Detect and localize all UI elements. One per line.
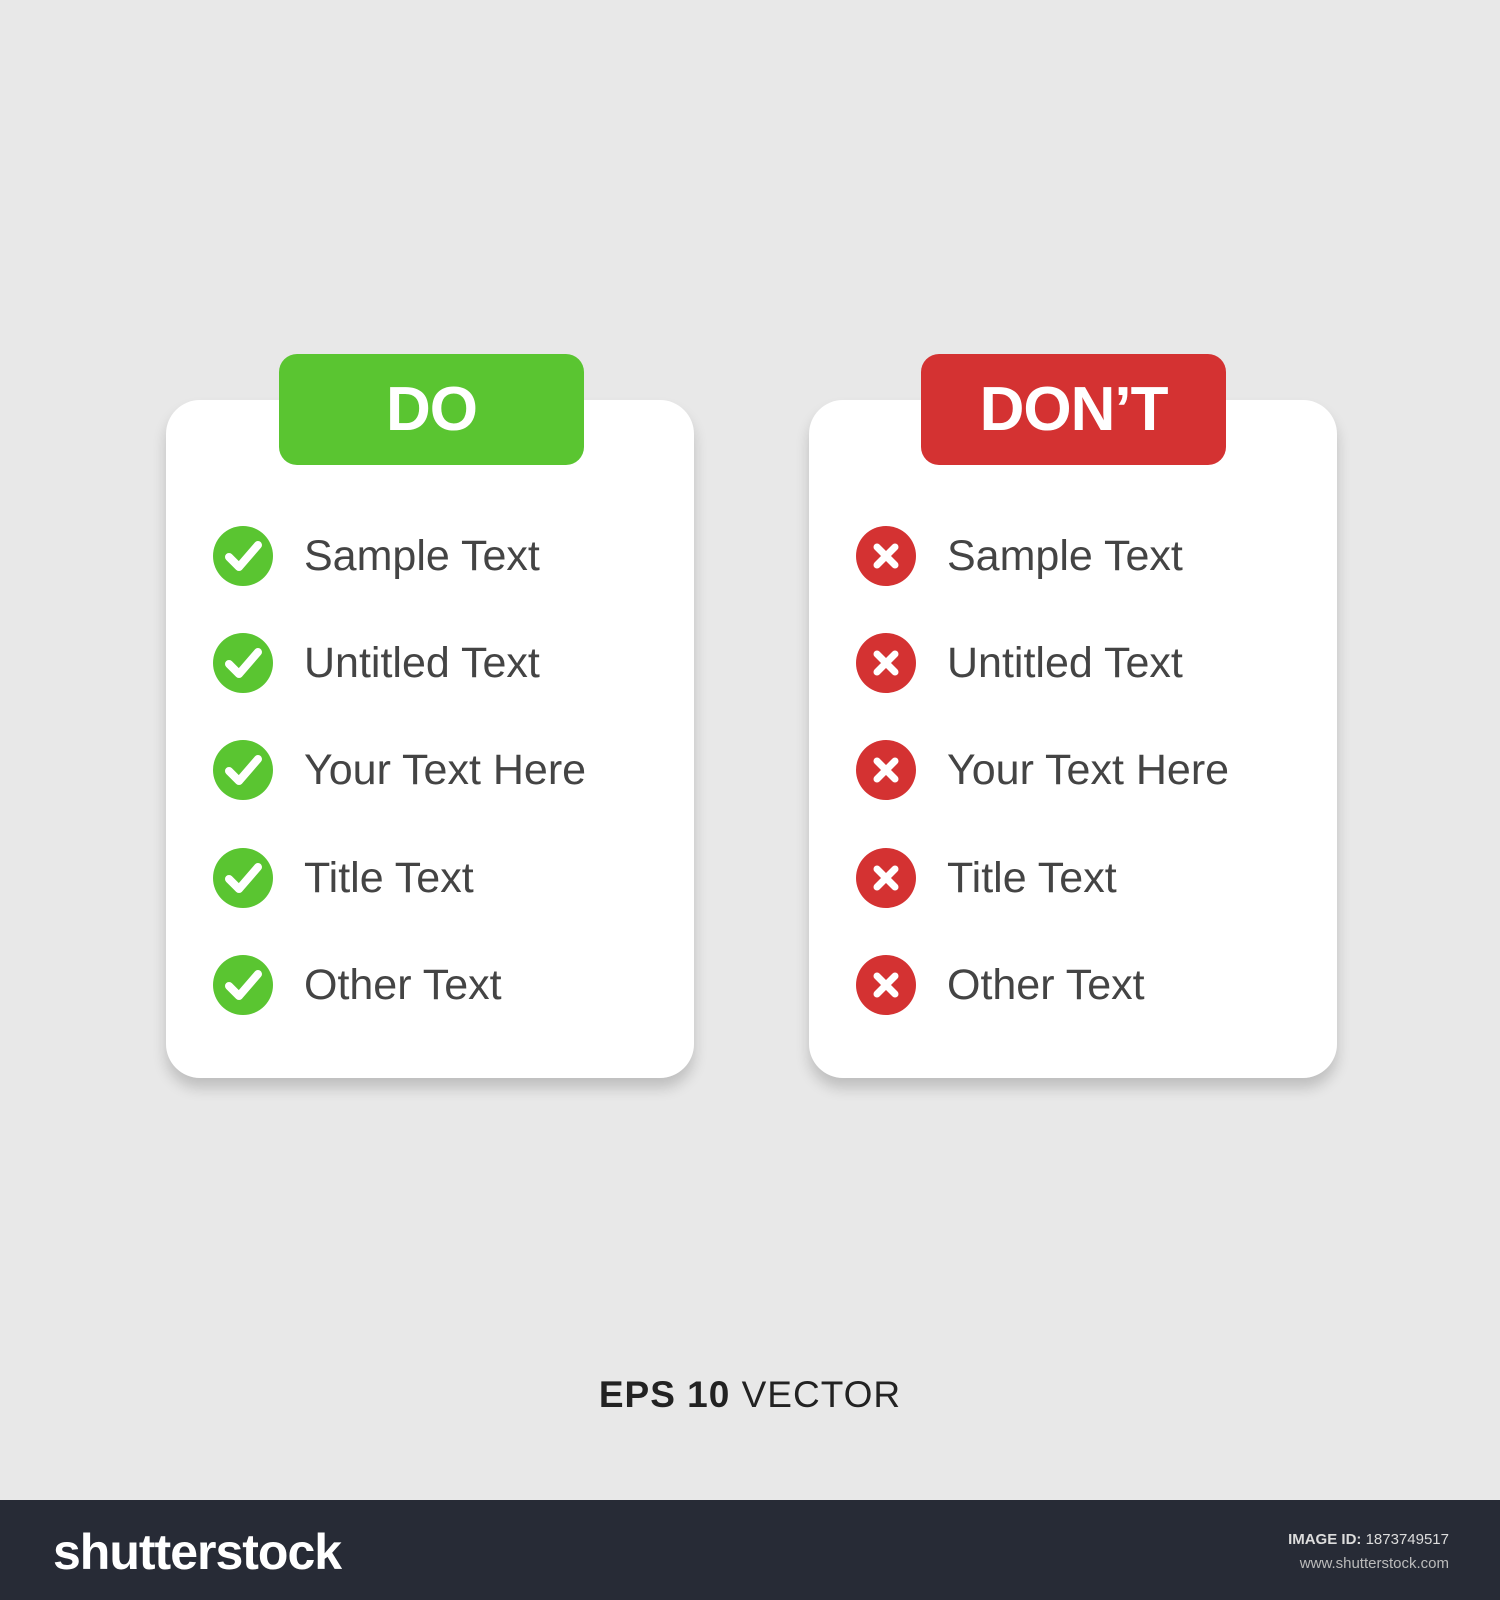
list: do items: Untitled Text [304,639,540,687]
heading: DON'T tab [921,354,1226,465]
list: do items: Other Text [304,961,502,1009]
panel: do card [166,400,694,1078]
footer bar [0,1500,1500,1600]
list: dont items: Your Text Here [947,746,1229,794]
heading: DO tab: DO [386,375,477,444]
heading: DO tab [279,354,584,465]
footer image id: IMAGE ID: 1873749517 [1288,1531,1449,1548]
heading: DON'T tab: DON’T [980,375,1167,444]
footer logo: shutterstock [53,1524,341,1580]
list: dont items [856,526,1229,1015]
list: dont items: Untitled Text [947,639,1183,687]
list: dont items: Title Text [947,854,1117,902]
footer image id: www.shutterstock.com [1300,1555,1449,1572]
list: dont items: Other Text [947,961,1145,1009]
list: do items: Sample Text [304,532,540,580]
list: do items [213,526,586,1015]
list: do items: Title Text [304,854,474,902]
caption: EPS 10 VECTOR: EPS 10 VECTOR [599,1374,901,1415]
footer image id [1288,1531,1449,1572]
list: do items: Your Text Here [304,746,586,794]
panel: dont card [809,400,1337,1078]
list: dont items: Sample Text [947,532,1183,580]
